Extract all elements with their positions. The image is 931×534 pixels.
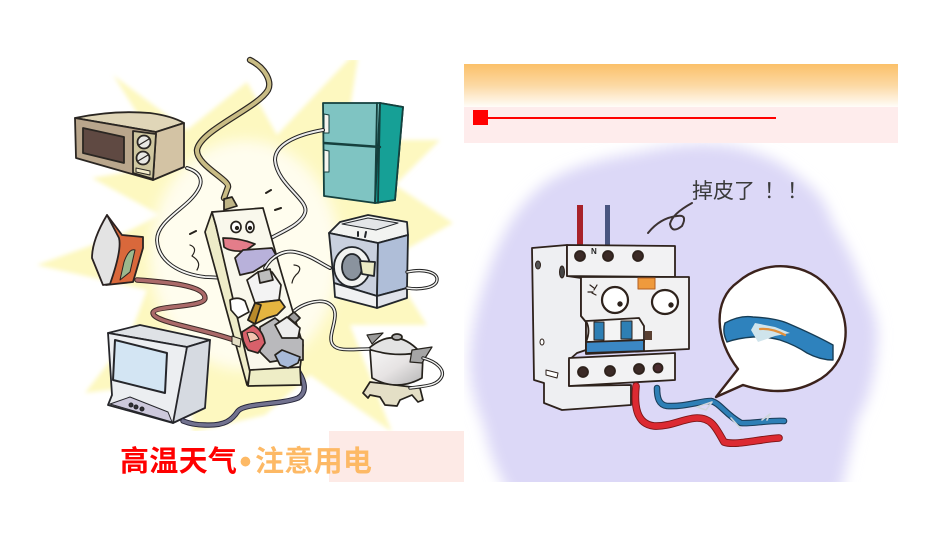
- icon: microwave oven: [75, 112, 184, 180]
- power cords: [137, 60, 442, 425]
- starburst background: [37, 58, 453, 432]
- icon: television: [108, 325, 210, 423]
- arrow squiggle: [648, 203, 692, 233]
- title: 高温天气·注意用电: [120, 431, 464, 482]
- exclamation text: 掉皮了!!: 掉皮了: [692, 180, 755, 203]
- speech bubble with damaged cable: [716, 266, 846, 397]
- icon: power strip with face: [205, 197, 303, 386]
- illustration: overloaded power strip with appliances: [37, 58, 453, 432]
- title text: •: [240, 443, 252, 481]
- icon: clothes iron: [92, 215, 143, 285]
- supply wires: [577, 205, 610, 244]
- N terminal label: N: [591, 247, 597, 256]
- blue frayed wire: [657, 388, 784, 429]
- title text: 注意用电: [255, 445, 372, 478]
- header panel: pink band: [464, 107, 898, 143]
- pink highlight block: [329, 431, 464, 482]
- sweat and spark marks: [190, 190, 300, 283]
- icon: refrigerator: [323, 103, 403, 203]
- washing machine cord: [265, 252, 330, 268]
- icon: cooking pot on stove: [363, 333, 432, 406]
- title text: 高温天气: [120, 445, 237, 478]
- exclamation text: 掉皮了!!: ！: [764, 180, 785, 203]
- exclamation text: 掉皮了!!: ！: [787, 180, 808, 203]
- washing machine cord highlight: [265, 252, 330, 268]
- purple watercolor background: [470, 144, 877, 495]
- breaker body: [532, 245, 689, 410]
- icon: washing machine: [329, 215, 408, 308]
- illustration: leaking circuit breaker: [470, 144, 877, 495]
- header panel: gradient band: [464, 64, 898, 107]
- red wire: [635, 386, 779, 443]
- marker: red square with line: [473, 110, 776, 125]
